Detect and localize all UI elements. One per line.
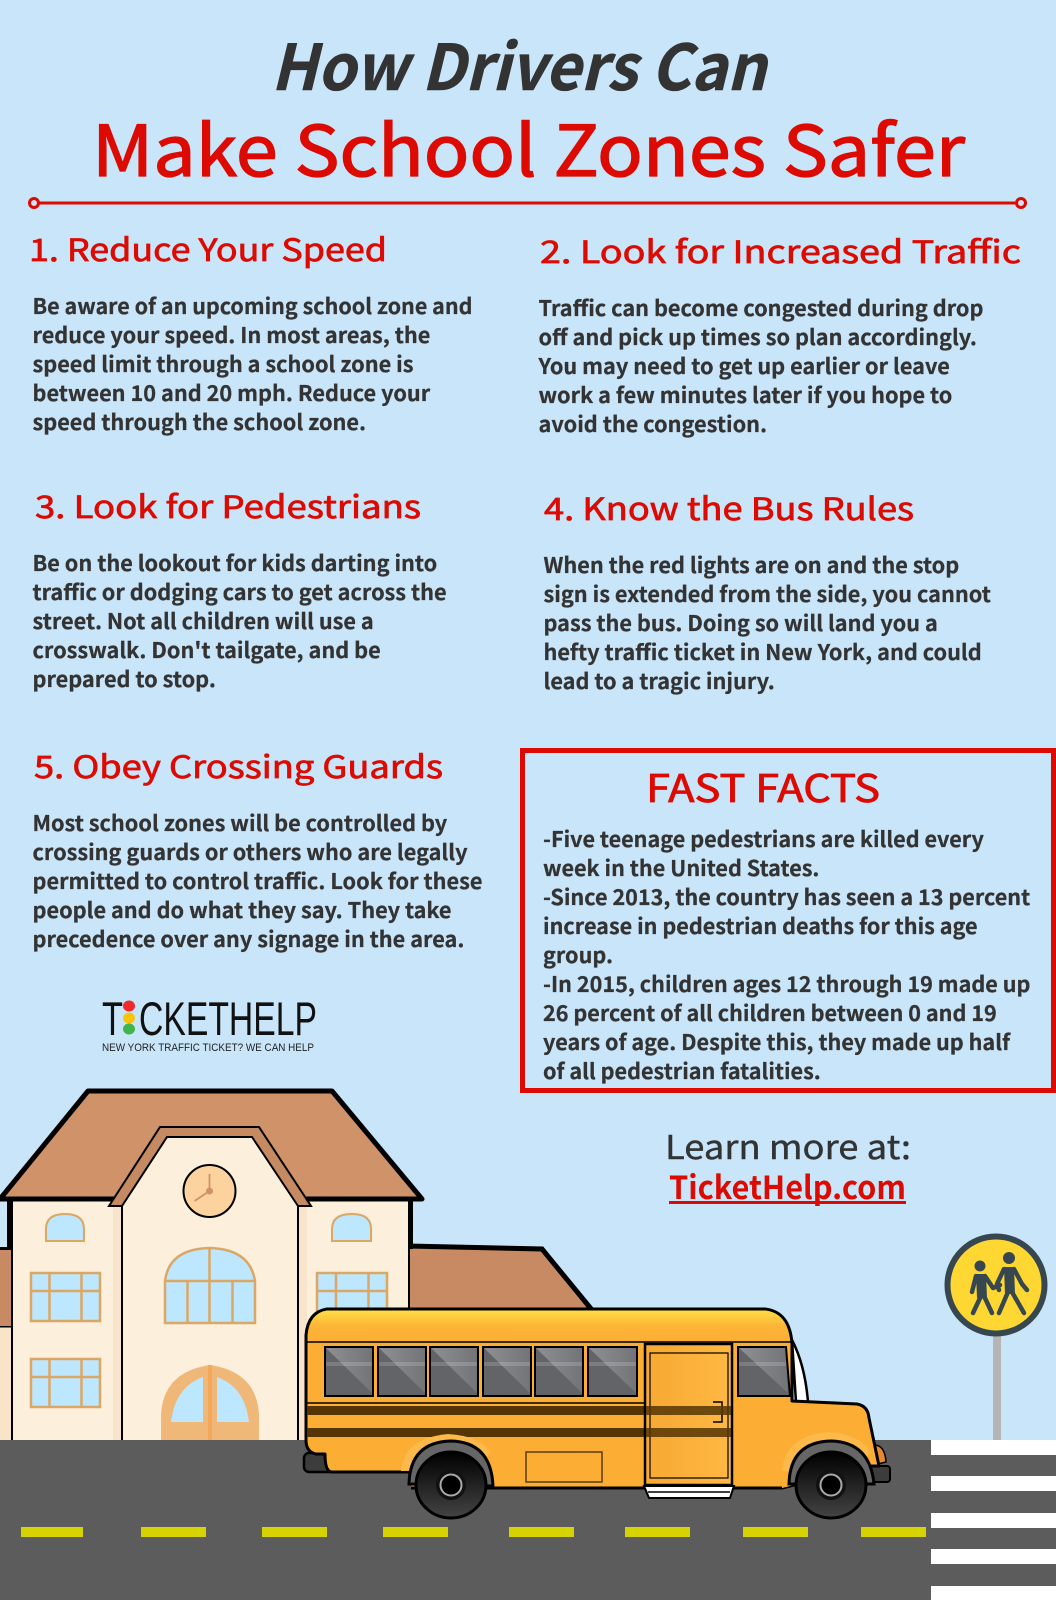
front bumper bbox=[867, 1466, 890, 1482]
tip 1: speed limit through a school zone is bbox=[32, 348, 414, 379]
clock bbox=[184, 1165, 236, 1217]
grid windows bbox=[31, 1248, 387, 1407]
title: How Drivers Can bbox=[271, 18, 769, 109]
panel: fast facts: week in the United States. bbox=[543, 852, 819, 883]
logo: T bbox=[102, 992, 123, 1045]
panel: fast facts: of all pedestrian fatalities. bbox=[543, 1055, 821, 1086]
tip 2: Traffic can become congested during drop bbox=[538, 292, 983, 323]
road bbox=[0, 1440, 1056, 1600]
title bbox=[92, 18, 966, 197]
tip 1: 1. Reduce Your Speed bbox=[29, 225, 387, 270]
school building bbox=[0, 1091, 422, 1444]
tip 3: street. Not all children will use a bbox=[32, 605, 374, 636]
tip 2: You may need to get up earlier or leave bbox=[538, 350, 950, 381]
tip 4: When the red lights are on and the stop bbox=[544, 549, 959, 580]
bus body bbox=[306, 1309, 879, 1488]
side wings bbox=[12, 1199, 122, 1444]
panel: fast facts: -In 2015, children ages 12 through 19 made up bbox=[543, 968, 1030, 999]
windshield edge bbox=[792, 1340, 808, 1402]
tip 3 bbox=[32, 482, 447, 694]
tip 3: crosswalk. Don't tailgate, and be bbox=[32, 634, 381, 665]
logo: CKETHELP bbox=[139, 992, 317, 1045]
roof bbox=[308, 1310, 790, 1342]
stripes bbox=[307, 1406, 732, 1437]
tip 2: off and pick up times so plan accordingly. bbox=[538, 321, 977, 352]
tip 4: 4. Know the Bus Rules bbox=[544, 484, 914, 529]
tip 3: Be on the lookout for kids darting into bbox=[32, 547, 437, 578]
title: Make School Zones Safer bbox=[92, 96, 966, 197]
center window bbox=[165, 1248, 255, 1323]
panel: fast facts: years of age. Despite this, they made up half bbox=[543, 1026, 1011, 1057]
call to action bbox=[665, 1121, 911, 1209]
tip 3: 3. Look for Pedestrians bbox=[35, 482, 421, 527]
tip 4: pass the bus. Doing so will land you a bbox=[544, 607, 938, 638]
tip 2: avoid the congestion. bbox=[538, 408, 767, 439]
tip 5: Most school zones will be controlled by bbox=[32, 807, 448, 838]
tip 3: prepared to stop. bbox=[32, 663, 216, 694]
tip 2: 2. Look for Increased Traffic bbox=[540, 227, 1021, 272]
luggage panel bbox=[526, 1452, 602, 1482]
tip 1: Be aware of an upcoming school zone and bbox=[32, 290, 472, 321]
tip 5: 5. Obey Crossing Guards bbox=[34, 742, 443, 787]
divider line bbox=[30, 198, 1026, 208]
tip 5: people and do what they say. They take bbox=[32, 894, 451, 925]
logo: NEW YORK TRAFFIC TICKET? WE CAN HELP bbox=[102, 1042, 314, 1054]
panel: fast facts: FAST FACTS bbox=[646, 758, 880, 813]
tip 2 bbox=[538, 227, 1021, 439]
panel: fast facts: -Five teenage pedestrians are killed every bbox=[543, 823, 984, 854]
door bbox=[645, 1344, 732, 1485]
logo bbox=[102, 992, 317, 1054]
tip 4 bbox=[544, 484, 991, 696]
tip 2: work a few minutes later if you hope to bbox=[538, 379, 952, 410]
tip 1 bbox=[29, 225, 472, 437]
rear wheel bbox=[401, 1434, 493, 1518]
headlight bbox=[874, 1445, 886, 1464]
step bbox=[644, 1486, 734, 1498]
tip 4: sign is extended from the side, you cannot bbox=[544, 578, 991, 609]
call to action: Learn more at: bbox=[665, 1121, 911, 1169]
panel: fast facts: 26 percent of all children between 0 and 19 bbox=[543, 997, 997, 1028]
panel: fast facts: group. bbox=[543, 939, 613, 970]
tip 5: crossing guards or others who are legally bbox=[32, 836, 468, 867]
crosswalk bbox=[931, 1440, 1056, 1600]
tip 5 bbox=[32, 742, 482, 954]
panel: fast facts bbox=[522, 750, 1054, 1090]
panel: fast facts: increase in pedestrian deaths for this age bbox=[543, 910, 978, 941]
tip 1: speed through the school zone. bbox=[32, 406, 366, 437]
door bbox=[161, 1365, 259, 1440]
front wheel bbox=[782, 1432, 874, 1518]
tip 1: reduce your speed. In most areas, the bbox=[32, 319, 430, 350]
panel: fast facts: -Since 2013, the country has seen a 13 percent bbox=[543, 881, 1030, 912]
school bus bbox=[304, 1309, 890, 1518]
tip 1: between 10 and 20 mph. Reduce your bbox=[32, 377, 431, 408]
call to action: TicketHelp.com bbox=[669, 1163, 906, 1209]
tip 4: lead to a tragic injury. bbox=[544, 665, 775, 696]
arched windows bbox=[46, 1214, 84, 1241]
rear bumper bbox=[304, 1453, 334, 1472]
tip 5: permitted to control traffic. Look for these bbox=[32, 865, 482, 896]
school crossing sign bbox=[948, 1236, 1044, 1440]
tip 3: traffic or dodging cars to get across the bbox=[32, 576, 447, 607]
tip 4: hefty traffic ticket in New York, and could bbox=[544, 636, 982, 667]
windows bbox=[325, 1347, 790, 1396]
tip 5: precedence over any signage in the area. bbox=[32, 923, 464, 954]
back wing of school bbox=[0, 1246, 592, 1440]
